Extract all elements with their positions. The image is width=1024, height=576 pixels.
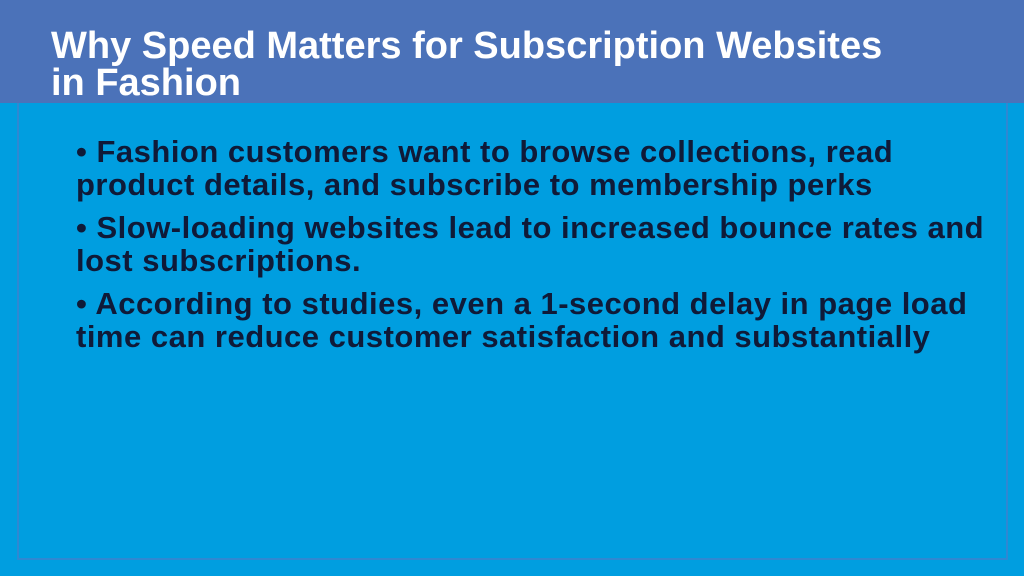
title: Why Speed Matters for Subscription Websites (51, 25, 882, 67)
bullet 1: product details, and subscribe to membership perks (76, 167, 873, 202)
bullet 3: • According to studies, even a 1-second delay in page load (76, 286, 967, 321)
bullet 2 (76, 210, 984, 278)
title: in Fashion (51, 62, 241, 104)
bullet 1: • Fashion customers want to browse collections, read (76, 134, 893, 169)
title (51, 25, 882, 104)
bullet 2: lost subscriptions. (76, 243, 361, 278)
content frame (17, 103, 1008, 560)
bullet 3 (76, 286, 967, 354)
bullet 2: • Slow-loading websites lead to increased bounce rates and (76, 210, 984, 245)
header band (0, 0, 1024, 103)
bullet list (76, 134, 984, 354)
bullet 3: time can reduce customer satisfaction and substantially (76, 319, 930, 354)
bullet 1 (76, 134, 893, 202)
